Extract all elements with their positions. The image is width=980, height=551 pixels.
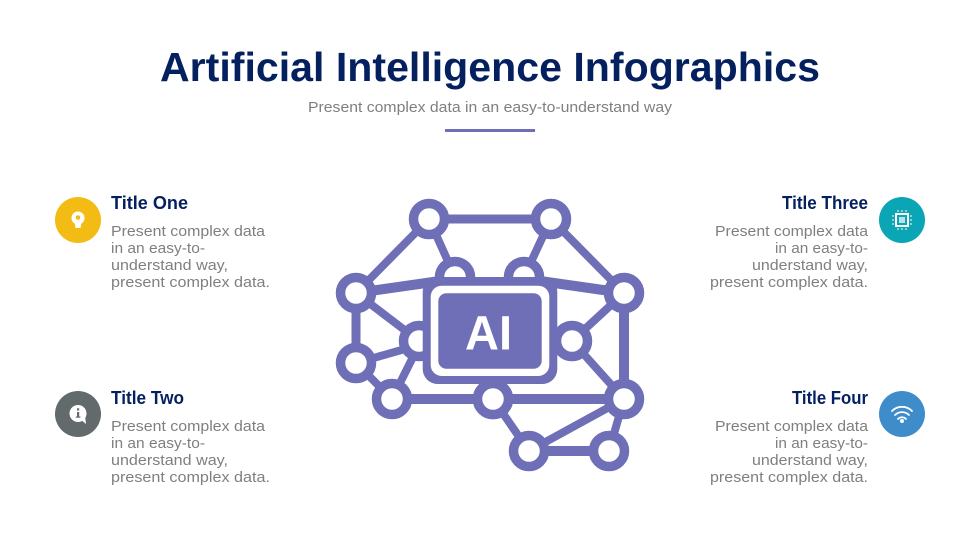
- item: Title One: [55, 193, 270, 291]
- body text: [111, 223, 270, 291]
- heading: Title Three: [782, 193, 868, 213]
- body text: [111, 418, 270, 486]
- central AI brain network icon: [340, 204, 640, 466]
- body text: present complex data.: [710, 469, 868, 486]
- body text: Present complex data: [715, 418, 869, 435]
- subtitle: Present complex data in an easy-to-understand way: [308, 99, 673, 116]
- network nodes: [340, 204, 640, 466]
- body text: in an easy-to-: [775, 240, 868, 257]
- heading: Title Two: [111, 388, 184, 408]
- heading: Title One: [111, 193, 188, 213]
- body text: Present complex data: [111, 223, 266, 240]
- body text: present complex data.: [111, 274, 270, 291]
- body text: understand way,: [111, 452, 228, 469]
- body text: understand way,: [752, 257, 868, 274]
- title underline accent: [445, 129, 535, 132]
- heading: Title Four: [792, 388, 868, 408]
- bottom node over chip: [478, 384, 508, 414]
- chip body: [423, 277, 557, 384]
- body text: present complex data.: [710, 274, 868, 291]
- icon: microchip: [879, 197, 925, 243]
- body text: Present complex data: [111, 418, 266, 435]
- icon: info speech bubble: [55, 391, 101, 437]
- body text: understand way,: [111, 257, 228, 274]
- body text: [710, 223, 869, 291]
- body text: [710, 418, 869, 486]
- icon: light bulb: [55, 197, 101, 243]
- body text: in an easy-to-: [775, 435, 868, 452]
- network connections: [356, 219, 624, 451]
- AI label: AI: [465, 308, 512, 360]
- body text: Present complex data: [715, 223, 869, 240]
- icon: wifi: [879, 391, 925, 437]
- body text: understand way,: [752, 452, 868, 469]
- title: Artificial Intelligence Infographics: [160, 44, 820, 90]
- body text: present complex data.: [111, 469, 270, 486]
- item: Title Three: [710, 193, 925, 291]
- item: Title Four: [710, 388, 925, 486]
- body text: in an easy-to-: [111, 435, 205, 452]
- body text: in an easy-to-: [111, 240, 205, 257]
- item: Title Two: [55, 388, 270, 486]
